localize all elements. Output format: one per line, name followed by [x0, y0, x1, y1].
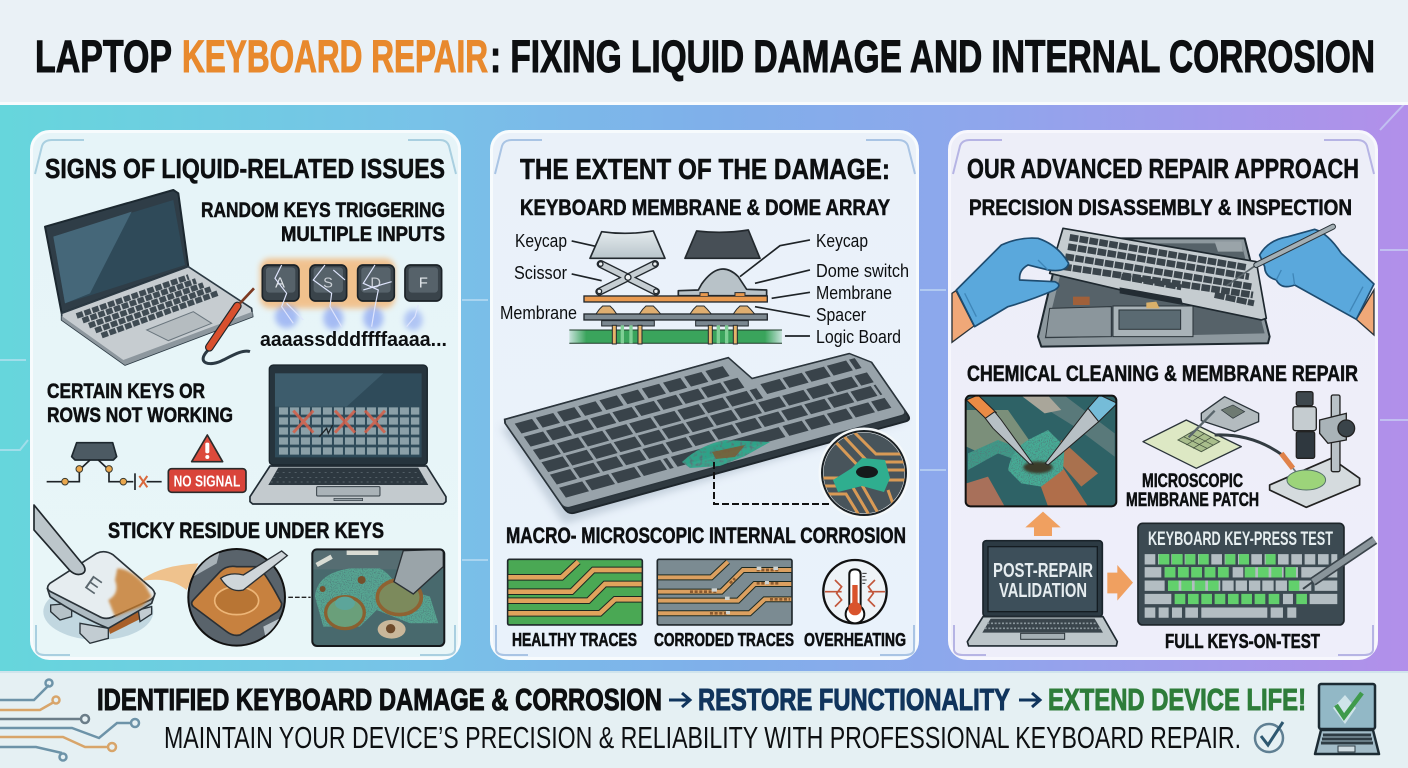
arrow: to restore [669, 693, 690, 707]
illustration: gloved hands disassembling laptop [952, 227, 1374, 347]
title: KEYBOARD REPAIR [182, 31, 488, 82]
heading: extent: THE EXTENT OF THE DAMAGE: [520, 154, 890, 186]
subheading: random keys: RANDOM KEYS TRIGGERING [201, 199, 445, 222]
label: logic board: Logic Board [816, 327, 901, 347]
subheading: sticky residue: STICKY RESIDUE UNDER KEYS [108, 518, 384, 543]
laptop text: post-repair: POST-REPAIR [993, 560, 1093, 582]
heading: signs: SIGNS OF LIQUID-RELATED ISSUES [45, 153, 445, 184]
icon: glitching keys A S D F [260, 258, 442, 331]
icon: warning triangle [192, 435, 223, 462]
header band [0, 0, 1408, 105]
panel: extent of the damage [492, 132, 918, 658]
label: membrane patch: MEMBRANE PATCH [1126, 490, 1259, 511]
label: microscopic: MICROSCOPIC [1142, 471, 1243, 492]
icon: laptop with check [1315, 684, 1379, 754]
subheading: multiple inputs: MULTIPLE INPUTS [281, 223, 445, 246]
footer band [0, 671, 1408, 768]
icon: sticky keycap: E [80, 571, 106, 599]
title: LAPTOP [35, 31, 172, 82]
icon: broken key circuit [47, 443, 162, 490]
icon: glitching keys A S D F: A [275, 276, 285, 292]
illustration: keyboard with corrosion [501, 325, 911, 524]
arrow: key to socket [143, 563, 198, 590]
icon: glitching keys A S D F: F [419, 276, 428, 292]
headline: identified damage: IDENTIFIED KEYBOARD DAMAGE & CORROSION [97, 682, 662, 717]
arrow: up [1025, 512, 1061, 536]
subheading: disassembly: PRECISION DISASSEMBLY & INSPECTION [969, 195, 1352, 220]
connector: dashed line [288, 595, 311, 599]
decoration: circuit traces [0, 680, 139, 760]
icon: laptop with probe [45, 190, 254, 365]
subheading: membrane and dome: KEYBOARD MEMBRANE & DOME ARRAY [520, 195, 890, 220]
illustration: microscope [1270, 392, 1360, 507]
subheading: certain keys: CERTAIN KEYS OR [47, 380, 205, 403]
label: spacer: Spacer [816, 305, 866, 325]
label: corroded traces: CORRODED TRACES [654, 630, 794, 650]
headline: extend device life: EXTEND DEVICE LIFE! [1048, 682, 1306, 717]
headline: restore functionality: RESTORE FUNCTIONALITY [698, 682, 1010, 717]
panel: signs of liquid-related issues [32, 132, 460, 658]
icon: check circle [1255, 722, 1283, 752]
icon: post-repair laptop [967, 541, 1117, 646]
icon: sticky keycap [34, 505, 155, 643]
icon: magnified corrosion [821, 428, 910, 520]
label: membrane left: Membrane [500, 303, 577, 323]
panel: key-press test [1138, 523, 1375, 625]
label: dome switch: Dome switch [816, 261, 909, 281]
panel: advanced repair approach [950, 132, 1376, 658]
photo: corroded contacts [312, 549, 444, 646]
chart tile: corroded traces [657, 559, 792, 625]
chart tile: healthy traces [508, 559, 642, 625]
laptop text: validation: VALIDATION [999, 580, 1087, 602]
label: scissor: Scissor [514, 263, 567, 283]
badge: no signal [168, 469, 246, 492]
diagram: key cross-section [569, 230, 810, 344]
label: keycap right: Keycap [816, 231, 868, 251]
title [35, 31, 1375, 82]
label: membrane right: Membrane [816, 283, 892, 303]
subheading: macro microscopic corrosion: MACRO- MICROSCOPIC INTERNAL CORROSION [506, 523, 906, 548]
arrow: right [1107, 565, 1133, 601]
illustration: membrane patch tool [1143, 397, 1305, 483]
icon: glitching keys A S D F: S [323, 276, 333, 292]
photo: cleaning corroded board [966, 395, 1117, 506]
icon: magnified residue [188, 549, 290, 646]
icon: glitching keys A S D F: D [370, 276, 381, 292]
arrow: to extend [1019, 693, 1040, 707]
subheading: rows not working: ROWS NOT WORKING [47, 404, 233, 427]
icon: overheating thermometer [823, 560, 887, 623]
label: healthy traces: HEALTHY TRACES [512, 630, 637, 650]
text: repeated characters: aaaassdddffffaaaa... [260, 329, 447, 351]
label: full keys-on-test: FULL KEYS-ON-TEST [1165, 631, 1320, 653]
label: overheating: OVERHEATING [804, 630, 906, 650]
icon: laptop with dead keys [250, 365, 446, 504]
badge: no signal: NO SIGNAL [174, 473, 240, 490]
label: keycap left: Keycap [515, 231, 567, 251]
